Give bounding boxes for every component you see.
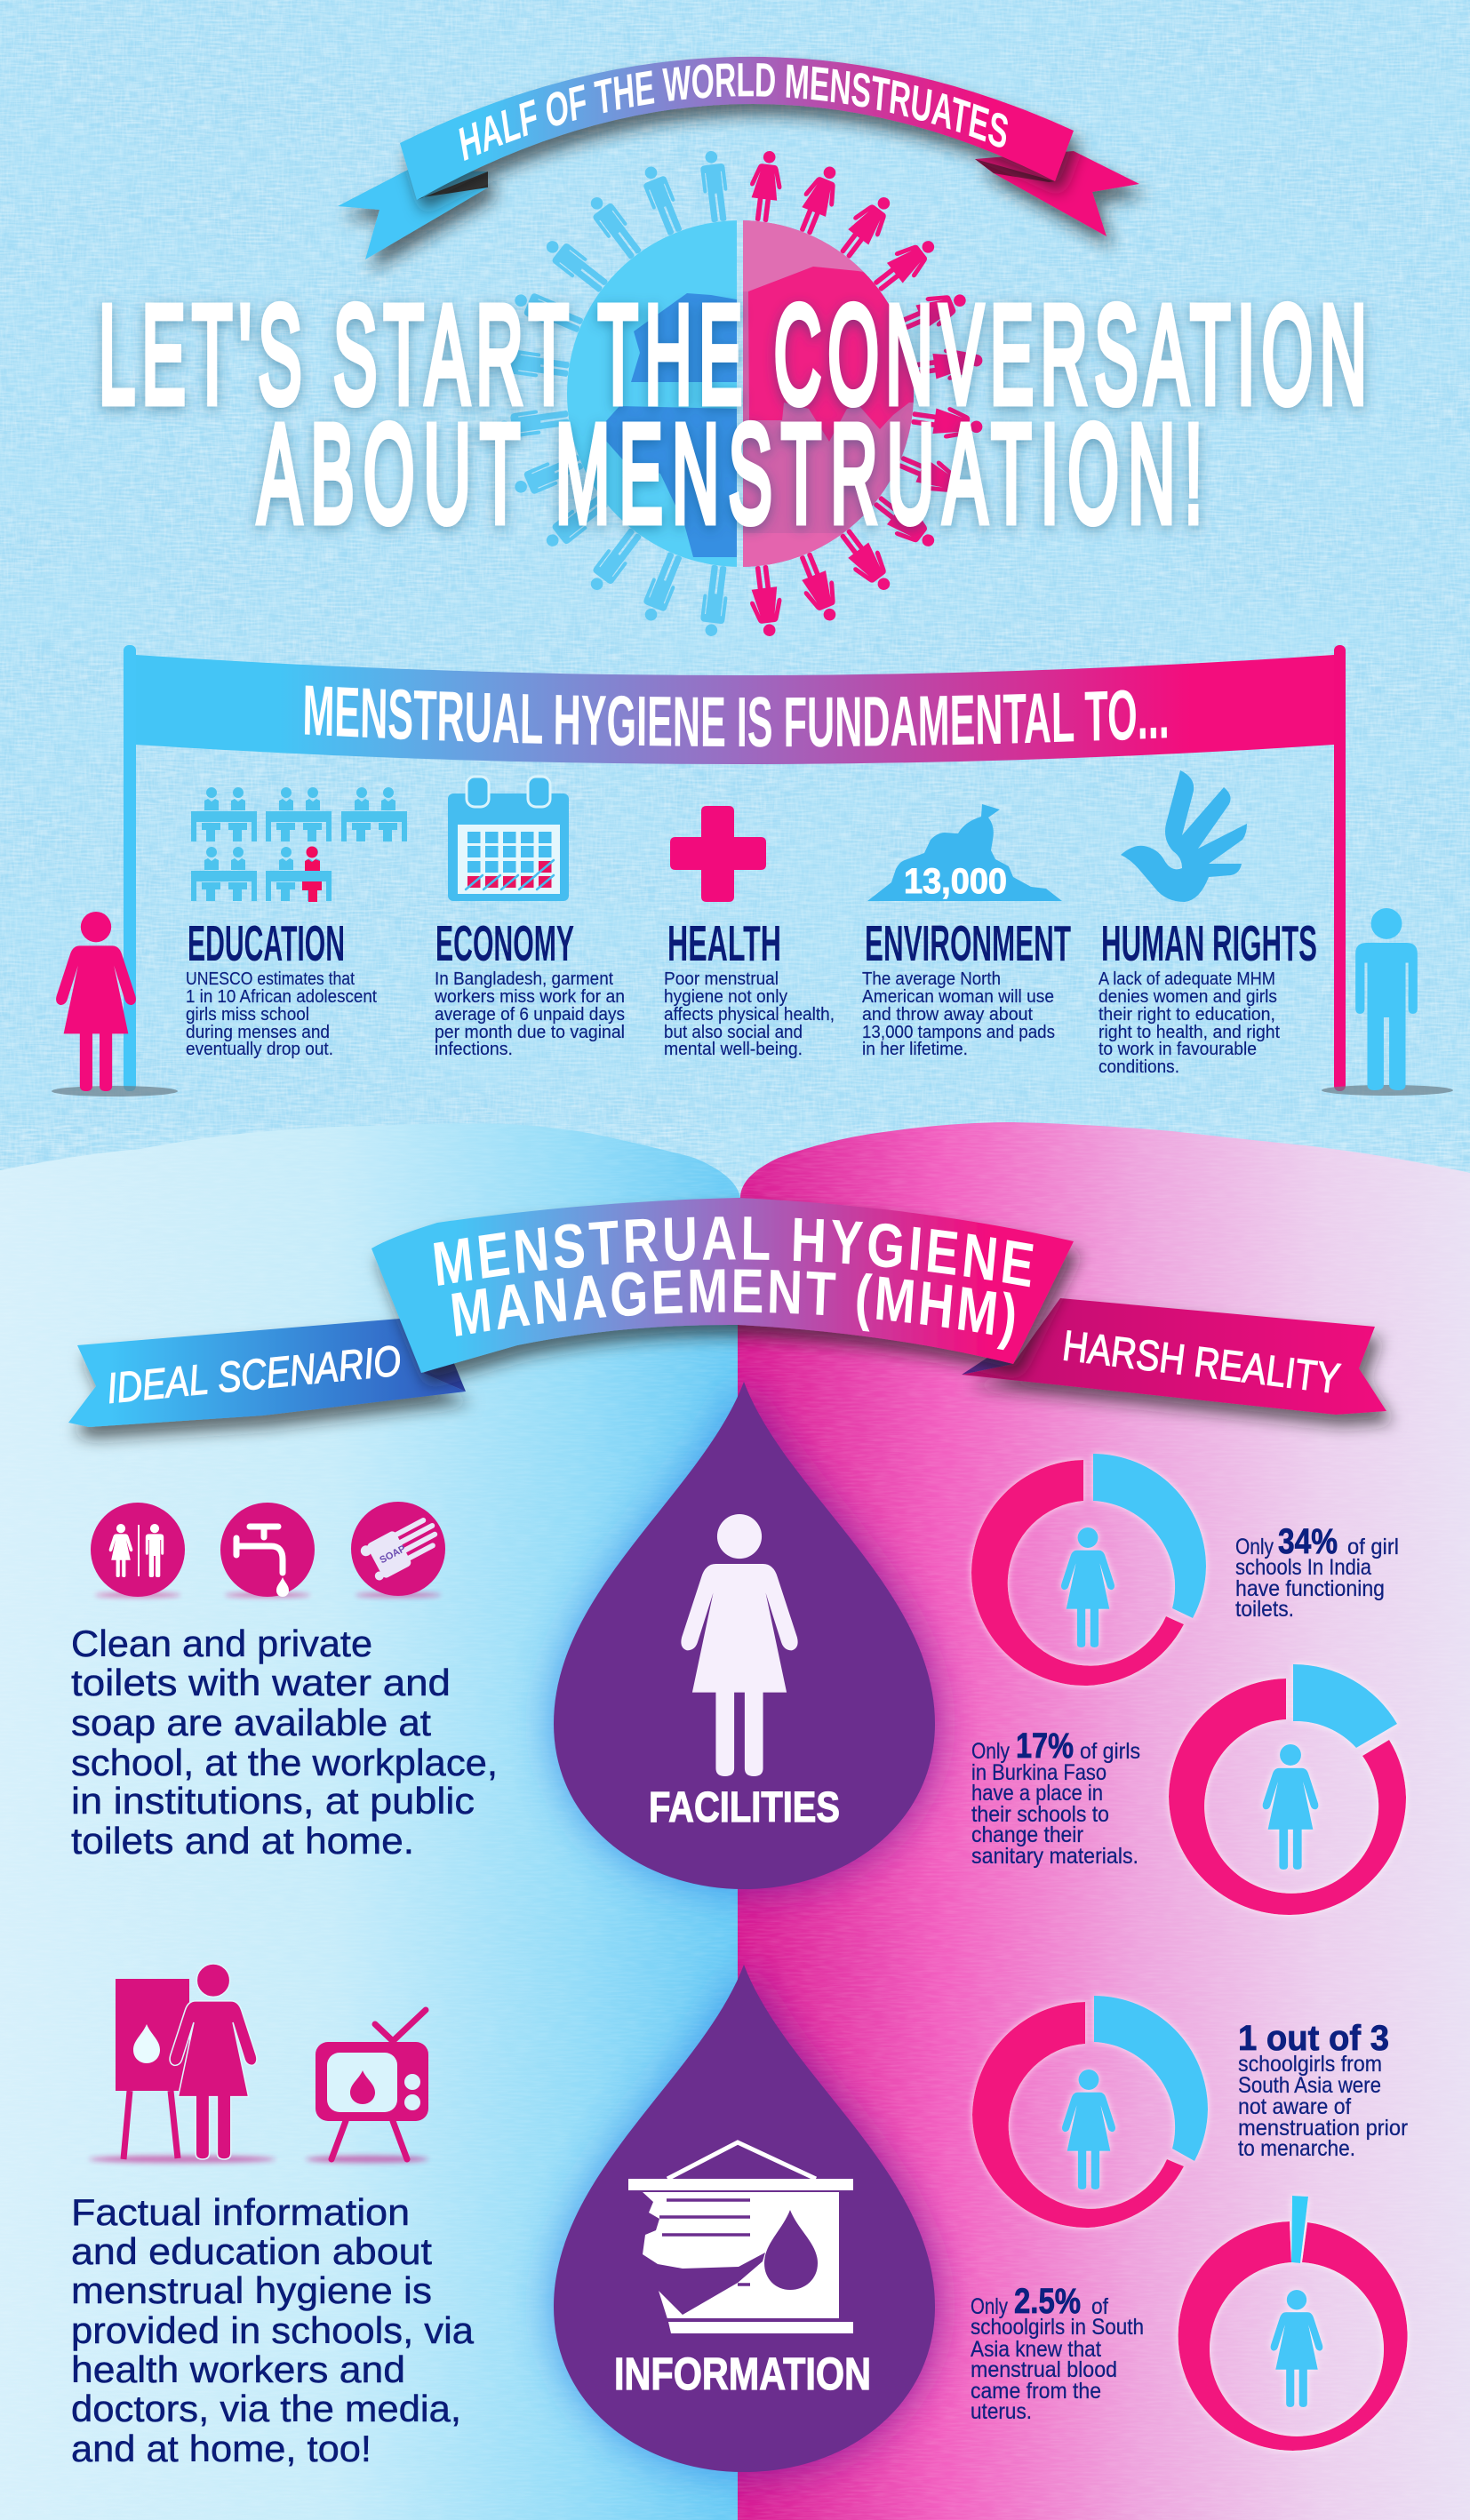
- stat text: 2.5%: menstrual blood: [971, 2357, 1117, 2382]
- stat text: 34%: have functioning: [1235, 1576, 1385, 1601]
- column: education: eventually drop out.: [186, 1040, 333, 1059]
- column: environment: ENVIRONMENT: [865, 915, 1071, 972]
- banner post right: [1334, 645, 1346, 1091]
- stat text: 1 out of 3: 1 out of 3: [1238, 2019, 1389, 2058]
- ribbon: harsh reality: [962, 1298, 1386, 1415]
- column: education: girls miss school: [186, 1005, 309, 1025]
- stat text: 34%: toilets.: [1235, 1597, 1294, 1622]
- donut chart: 17%: [1169, 1664, 1406, 1915]
- figures: pink women around the right side: [746, 149, 985, 638]
- donut chart: 2.5%: [1178, 2196, 1408, 2451]
- text: information ideal scenario: provided in schools, via: [71, 2309, 475, 2351]
- stat text: 1 out of 3: South Asia were: [1238, 2073, 1381, 2098]
- donut chart: 34%: [971, 1454, 1206, 1686]
- text: information ideal scenario: doctors, via the media,: [71, 2388, 461, 2429]
- stat text: 34%: [1235, 1522, 1399, 1622]
- column: environment: and throw away about: [862, 1005, 1033, 1025]
- page texture overlay: [0, 1124, 1470, 2520]
- column: economy: workers miss work for an: [434, 987, 625, 1007]
- stat text: 17%: of girls: [1080, 1739, 1140, 1764]
- icon: woman teaching at easel: [89, 1964, 276, 2163]
- stat text: 2.5%: schoolgirls in South: [971, 2315, 1144, 2340]
- column: human rights: [1099, 915, 1317, 1077]
- drop: facilities: [554, 1382, 935, 1889]
- stat text: 34%: 34%: [1278, 1522, 1338, 1561]
- column: health: mental well-being.: [664, 1040, 803, 1059]
- column: economy: average of 6 unpaid days: [435, 1005, 625, 1025]
- drop: information: [554, 1965, 935, 2472]
- stat text: 17%: in Burkina Faso: [971, 1760, 1106, 1785]
- column: health: affects physical health,: [664, 1005, 835, 1025]
- stat text: 1 out of 3: [1238, 2019, 1408, 2161]
- text: information ideal scenario: health workers and: [71, 2349, 405, 2390]
- icon: woman: [681, 1514, 798, 1776]
- icon: environment waste pile: [867, 804, 1062, 901]
- text: facilities ideal scenario: [71, 1623, 498, 1862]
- column: health: hygiene not only: [664, 987, 787, 1007]
- stat text: 1 out of 3: schoolgirls from: [1238, 2052, 1382, 2077]
- stat text: 2.5%: came from the: [971, 2379, 1101, 2404]
- column: environment: The average North: [862, 969, 1001, 989]
- globe: pink half: [743, 220, 914, 567]
- banner: menstrual hygiene management (MHM): MANAGEMENT (MHM): [451, 1269, 1015, 1351]
- text: facilities ideal scenario: toilets with water and: [71, 1662, 451, 1703]
- icon: water tap circle: [220, 1503, 315, 1598]
- title: [99, 276, 1367, 551]
- stat text: 34%: of girl: [1347, 1535, 1399, 1559]
- section: menstrual hygiene is fundamental to: [52, 645, 1453, 1097]
- text: information ideal scenario: and at home, too!: [71, 2428, 371, 2469]
- icon: health cross: [670, 806, 766, 902]
- text: information ideal scenario: Factual information: [71, 2191, 410, 2233]
- stat text: 34%: Only: [1235, 1535, 1274, 1559]
- text: facilities ideal scenario: toilets and at home.: [71, 1820, 414, 1862]
- label: facilities: FACILITIES: [649, 1784, 840, 1831]
- globe with ring of people: [497, 149, 985, 638]
- stat text: 2.5%: Asia knew that: [971, 2337, 1101, 2362]
- text: information ideal scenario: [71, 2191, 475, 2469]
- icon: economy calendar: [448, 777, 569, 901]
- stat text: 2.5%: Only: [971, 2294, 1008, 2319]
- text: facilities ideal scenario: soap are available at: [71, 1702, 431, 1743]
- icon: torn education board: [622, 2142, 853, 2333]
- ribbon: harsh reality: HARSH REALITY: [1060, 1322, 1343, 1403]
- ribbon tail left: [338, 170, 488, 259]
- column: education: during menses and: [186, 1023, 330, 1042]
- column: human rights: right to health, and right: [1099, 1023, 1280, 1042]
- icon: toilets circle: [91, 1503, 185, 1598]
- woman figure left: [52, 912, 178, 1097]
- stat text: 1 out of 3: menstruation prior: [1238, 2116, 1408, 2141]
- panel: harsh reality pink page: [738, 1122, 1470, 2520]
- stat text: 1 out of 3: to menarche.: [1238, 2136, 1355, 2161]
- column: human rights: their right to education,: [1099, 1005, 1275, 1025]
- column: education: EDUCATION: [188, 915, 345, 972]
- stat text: 17%: change their: [971, 1822, 1083, 1847]
- stat text: 2.5%: [971, 2282, 1144, 2424]
- stat text: 34%: schools In India: [1235, 1555, 1371, 1580]
- icon: environment waste pile: 13,000: [904, 862, 1007, 901]
- icon: soap and hands circle: [351, 1502, 445, 1598]
- column: environment: 13,000 tampons and pads: [862, 1023, 1055, 1042]
- text: information ideal scenario: menstrual hygiene is: [71, 2269, 432, 2311]
- column: environment: in her lifetime.: [862, 1040, 968, 1059]
- column: economy: infections.: [435, 1040, 513, 1059]
- text: information ideal scenario: and education about: [71, 2230, 432, 2272]
- column: health: but also social and: [664, 1023, 803, 1042]
- donut chart: 1 out of 3: [972, 1996, 1208, 2228]
- banner text: MENSTRUAL HYGIENE IS FUNDAMENTAL TO...: [305, 686, 1167, 747]
- column: economy: [434, 915, 625, 1059]
- ribbon tail right: [975, 151, 1139, 236]
- ribbon body: [400, 57, 1074, 200]
- column: human rights: to work in favourable: [1099, 1040, 1257, 1059]
- globe: blue half: [560, 213, 737, 573]
- column: education: 1 in 10 African adolescent: [186, 987, 377, 1007]
- stat text: 1 out of 3: not aware of: [1238, 2094, 1351, 2119]
- drop glow shadows: [554, 1382, 935, 2472]
- label: information: INFORMATION: [614, 2349, 871, 2399]
- column: human rights: conditions.: [1099, 1057, 1179, 1077]
- column: economy: ECONOMY: [435, 915, 574, 972]
- stat text: 17%: 17%: [1016, 1727, 1074, 1766]
- banner post left: [124, 645, 136, 1091]
- title: ABOUT MENSTRUATION!: [258, 395, 1202, 551]
- icon: television: [306, 2010, 428, 2163]
- column: environment: American woman will use: [862, 987, 1054, 1007]
- banner: menstrual hygiene management (MHM): MENSTRUAL HYGIENE: [434, 1216, 1034, 1287]
- stat text: 17%: sanitary materials.: [971, 1844, 1138, 1869]
- stat text: 17%: Only: [971, 1739, 1010, 1764]
- man figure right: [1322, 908, 1453, 1096]
- ribbon: ideal scenario: [68, 1319, 466, 1427]
- text: facilities ideal scenario: in institutions, at public: [71, 1780, 475, 1822]
- stat text: 2.5%: of: [1091, 2294, 1108, 2319]
- text: facilities ideal scenario: school, at the workplace,: [71, 1742, 498, 1783]
- figures: blue men around the left side: [497, 149, 731, 638]
- column: economy: per month due to vaginal: [435, 1023, 625, 1042]
- column: health: [664, 915, 835, 1059]
- text: facilities ideal scenario: Clean and private: [71, 1623, 372, 1664]
- banner: [136, 655, 1334, 764]
- stat text: 17%: their schools to: [971, 1802, 1109, 1827]
- icon: education classroom: [191, 787, 407, 902]
- column: education: UNESCO estimates that: [186, 969, 355, 989]
- ribbon: ideal scenario: IDEAL SCENARIO: [105, 1337, 403, 1413]
- column: human rights: A lack of adequate MHM: [1099, 969, 1275, 989]
- icon: soap and hands circle: SOAP: [378, 1543, 408, 1566]
- column: health: HEALTH: [667, 915, 781, 972]
- column: human rights: denies women and girls: [1099, 987, 1277, 1007]
- column: health: Poor menstrual: [664, 969, 779, 989]
- stat text: 17%: [971, 1727, 1140, 1869]
- ribbon text: HALF OF THE WORLD MENSTRUATES: [459, 63, 1008, 161]
- banner: menstrual hygiene management (MHM): [371, 1198, 1074, 1373]
- stat text: 17%: have a place in: [971, 1781, 1103, 1806]
- stat text: 2.5%: uterus.: [971, 2399, 1032, 2424]
- panel: ideal scenario blue page: [0, 1123, 740, 2520]
- column: economy: In Bangladesh, garment: [435, 969, 613, 989]
- stat text: 2.5%: 2.5%: [1014, 2282, 1081, 2321]
- ribbon: half of the world menstruates: [338, 56, 1149, 277]
- title: LET'S START THE CONVERSATION: [99, 276, 1367, 432]
- column: education: [186, 915, 377, 1059]
- icon: human rights hand dove: [1121, 770, 1247, 902]
- column: environment: [862, 915, 1071, 1059]
